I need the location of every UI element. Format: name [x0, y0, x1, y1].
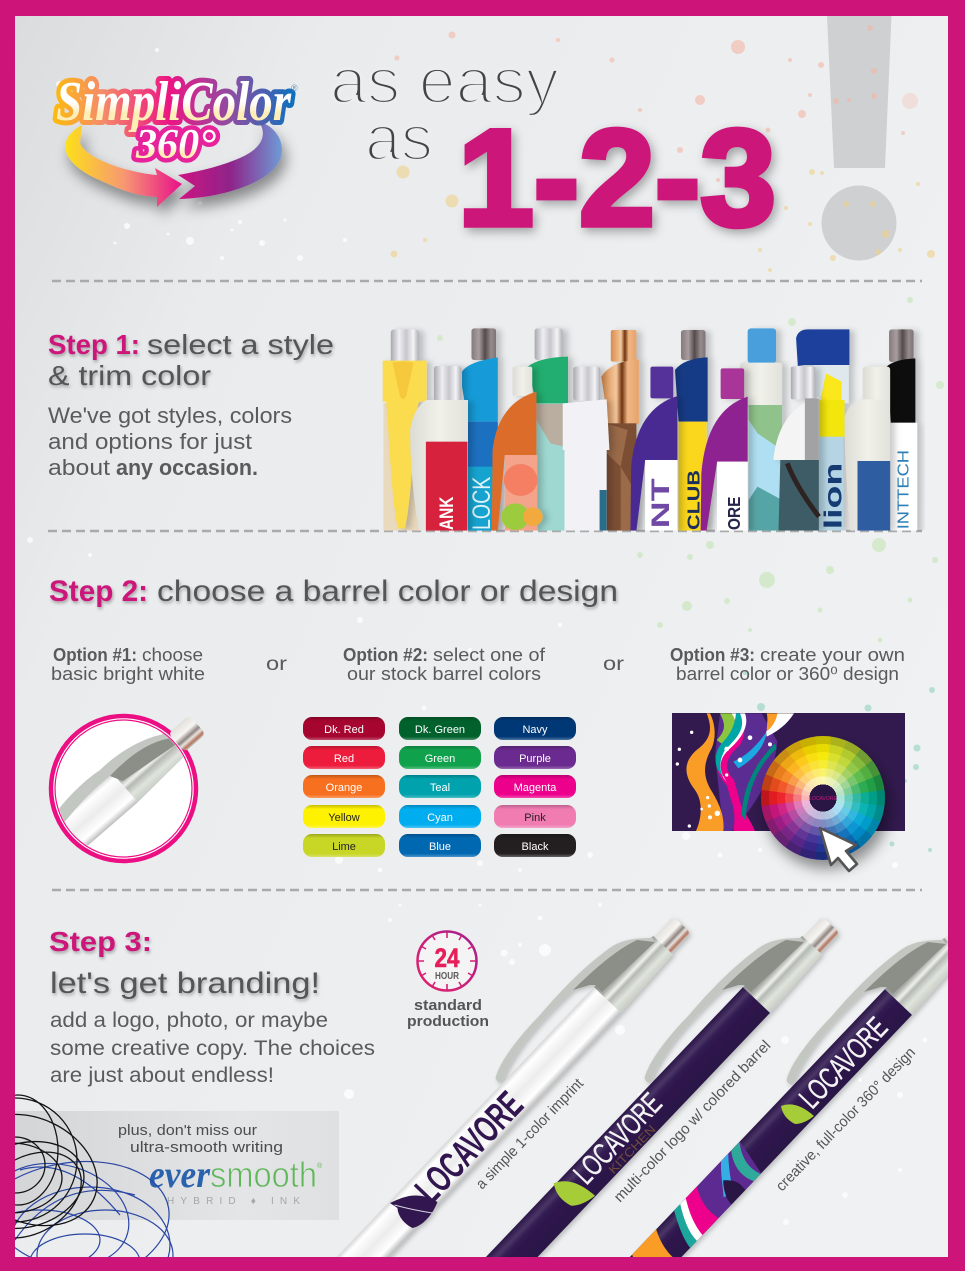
- standard production label: production: [407, 1014, 489, 1030]
- eversmooth logo: HYBRID ♦ INK: [167, 1196, 300, 1207]
- option 3 label: [670, 645, 905, 684]
- imprint LOCAVORE white: LOCAVORE: [793, 1011, 894, 1115]
- option 2 label: select one of: [433, 645, 546, 665]
- magenta pen: ORE: [725, 497, 744, 530]
- eversmooth logo: ®: [317, 1162, 323, 1170]
- option 1 label: basic bright white: [51, 664, 205, 684]
- step 1 heading: [48, 329, 334, 391]
- eversmooth logo: [149, 1154, 323, 1207]
- title line 2: as: [365, 102, 433, 174]
- leaf logo green: [781, 1104, 814, 1124]
- step 2 heading: Step 2:: [49, 575, 148, 608]
- step 3 body: [50, 1008, 375, 1087]
- step 3 body: some creative copy. The choices: [50, 1036, 375, 1060]
- logo arrows: [65, 122, 282, 207]
- copper pen: [601, 330, 639, 531]
- color swatches: [303, 717, 576, 857]
- 24 hour badge: HOUR: [435, 971, 460, 982]
- title: as easy as 1-2-3: [330, 45, 776, 255]
- blue pen: LOCK: [469, 476, 496, 530]
- step 3 heading: [49, 926, 320, 1000]
- cursor arrow: [820, 828, 857, 871]
- purple pen: [630, 367, 677, 531]
- step 1 heading: & trim color: [48, 360, 211, 391]
- swatch column 1: [303, 717, 385, 857]
- option 2 label: our stock barrel colors: [347, 664, 541, 684]
- step 1 body: any occasion.: [116, 455, 258, 480]
- color wheel: [761, 736, 885, 860]
- swatch column 1: Orange: [326, 782, 362, 794]
- logo: SimpliColor 360: [56, 71, 298, 207]
- swatch column 1: Dk. Red: [324, 724, 364, 736]
- step 3 heading: Step 3:: [49, 926, 152, 957]
- swatch column 3: Purple: [519, 753, 551, 765]
- or separator 2: or: [603, 654, 625, 675]
- exclamation mark: [822, 16, 896, 260]
- swatch column 3: Navy: [522, 724, 548, 736]
- design art: [672, 713, 905, 831]
- wrap art: [632, 1141, 762, 1257]
- eversmooth logo: smooth: [210, 1154, 317, 1195]
- swatch column 2: Cyan: [427, 812, 453, 824]
- green pen: [528, 328, 568, 531]
- pen: white one-color: [337, 918, 692, 1257]
- step 2 heading: choose a barrel color or design: [157, 575, 618, 608]
- option 3 label: Option #3:: [670, 645, 755, 665]
- option 1 label: Option #1:: [53, 645, 137, 665]
- pen lineup: [383, 328, 917, 531]
- swatch column 3: Magenta: [514, 782, 557, 794]
- 24 hour badge: 24: [434, 943, 460, 973]
- yellow pen back barrel: [383, 403, 421, 531]
- option 1: white pen circle: [48, 714, 204, 864]
- eversmooth copy: ultra-smooth writing: [130, 1139, 283, 1156]
- pen scribble: [15, 1094, 174, 1257]
- caption 3: creative, full-color 360° design: [773, 1044, 919, 1195]
- step 1 heading: select a style: [147, 329, 334, 360]
- pens with imprints: [337, 918, 948, 1257]
- frosted blue pen: [845, 367, 890, 531]
- step 3 text: [49, 926, 375, 1087]
- dividers: [48, 281, 922, 890]
- step 1 heading: Step 1:: [48, 329, 140, 360]
- option 1 label: choose: [142, 645, 203, 665]
- eversmooth copy: plus, don't miss our: [118, 1122, 257, 1139]
- blue cap highlighter: lion: [820, 463, 848, 529]
- turquoise pen: [740, 328, 782, 531]
- swatch column 2: Green: [425, 753, 455, 765]
- option 3 label: create your own: [760, 645, 905, 665]
- swatch column 1: Yellow: [328, 812, 360, 824]
- pen: full-color 360 design: [630, 936, 948, 1257]
- caption 1: a simple 1-color imprint: [473, 1075, 588, 1193]
- imprint KITCHEN: KITCHEN: [606, 1122, 659, 1177]
- eversmooth panel: [15, 1111, 339, 1220]
- chrome pen: [773, 367, 819, 531]
- swatch column 1: Red: [334, 753, 354, 765]
- option 2 label: [343, 645, 546, 684]
- black pen: INTTECH: [895, 450, 912, 529]
- magenta pen: [701, 368, 748, 531]
- yellow pen: [383, 329, 427, 528]
- or separator 1: or: [266, 654, 288, 675]
- swatch column 2: [399, 717, 481, 857]
- step 3 heading: let's get branding!: [50, 967, 320, 1000]
- leaf logo green: [554, 1181, 595, 1206]
- leaf logo purple: [390, 1195, 438, 1228]
- step 1 body: We've got styles, colors: [48, 403, 292, 428]
- title numbers: 1-2-3: [458, 102, 776, 255]
- caption 2: multi-color logo w/ colored barrel: [611, 1037, 774, 1206]
- blue cap highlighter: [796, 329, 849, 531]
- imprint LOCAVORE: LOCAVORE: [408, 1084, 532, 1211]
- step 1 text: [48, 329, 334, 480]
- option 2 label: Option #2:: [343, 645, 428, 665]
- navy pen: CLUB: [684, 470, 704, 530]
- pen: purple multi-color: [486, 918, 842, 1257]
- option 3 label: barrel color or 360⁰ design: [676, 664, 899, 684]
- swatch column 3: [494, 717, 576, 857]
- swatch column 2: Dk. Green: [415, 724, 465, 736]
- standard production label: [407, 998, 489, 1030]
- registered mark: ®: [291, 83, 298, 93]
- step 1 body: [48, 403, 292, 480]
- red frosted pen: ANK: [436, 497, 458, 530]
- step 3 body: add a logo, photo, or maybe: [50, 1008, 328, 1032]
- orange pen: [492, 367, 543, 531]
- option 3: custom design with color wheel: [672, 713, 905, 871]
- 24 hour badge: [418, 932, 476, 990]
- eversmooth copy: [118, 1122, 283, 1156]
- pen captions: [473, 1037, 919, 1206]
- black pen: [887, 329, 917, 531]
- swatch column 3: Black: [522, 841, 549, 853]
- swatch column 3: Pink: [524, 812, 546, 824]
- step 1 body: about: [48, 455, 110, 480]
- swatch column 1: Lime: [332, 841, 356, 853]
- logo wordmark: SimpliColor: [56, 71, 292, 133]
- navy pen: [675, 330, 708, 531]
- swatch column 2: Teal: [430, 782, 450, 794]
- wheel center label: LOCAVORE: [809, 796, 837, 802]
- option 1 label: [51, 645, 205, 684]
- step 1 body: and options for just: [48, 429, 252, 454]
- title line 1: as easy: [330, 45, 559, 117]
- swatch column 2: Blue: [429, 841, 451, 853]
- step 3 body: are just about endless!: [50, 1063, 274, 1087]
- white pen: [563, 367, 609, 531]
- standard production label: standard: [414, 998, 482, 1014]
- purple pen: NT: [648, 478, 675, 528]
- logo 360: 360°: [135, 122, 216, 168]
- red frosted pen: [410, 366, 468, 531]
- eversmooth logo: ever: [149, 1154, 211, 1196]
- blue pen: [462, 328, 498, 531]
- imprint LOCAVORE white: LOCAVORE: [568, 1087, 669, 1191]
